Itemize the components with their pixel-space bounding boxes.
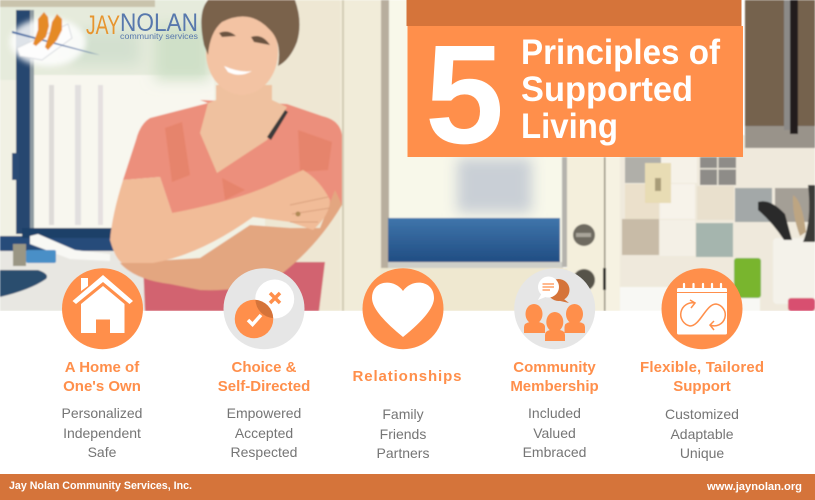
descriptors: Adaptable bbox=[670, 426, 734, 442]
logo wordmark bbox=[86, 9, 198, 41]
banner heading: Supported bbox=[521, 70, 693, 109]
icon: community people with speech bubbles bbox=[514, 268, 595, 349]
descriptors bbox=[665, 406, 739, 461]
logo backdrop and rowboat with orange figures bbox=[10, 12, 100, 66]
descriptors: Family bbox=[382, 406, 424, 422]
heading bbox=[510, 359, 599, 395]
principle 5 text bbox=[640, 359, 764, 461]
banner body bbox=[408, 26, 743, 157]
photo centre: door bbox=[265, 0, 624, 311]
icon: flexible calendar bbox=[662, 268, 742, 349]
principle 2 text bbox=[218, 359, 310, 460]
descriptors: Embraced bbox=[523, 444, 586, 460]
photo left: window and fence bbox=[0, 0, 345, 311]
logo wordmark: community services bbox=[120, 32, 198, 41]
heading: Community bbox=[513, 359, 596, 376]
big number 5: 5 bbox=[425, 15, 504, 173]
descriptors: Customized bbox=[665, 406, 739, 422]
white content panel bbox=[0, 311, 815, 474]
background photo: woman in kitchen bbox=[0, 0, 815, 311]
descriptors: Empowered bbox=[227, 405, 301, 421]
woman in coral shirt with crossed arms bbox=[110, 0, 342, 311]
banner heading bbox=[521, 33, 720, 146]
descriptors: Valued bbox=[533, 425, 576, 441]
heading: Membership bbox=[510, 378, 599, 395]
heading bbox=[218, 359, 310, 395]
principle 4 text bbox=[510, 359, 599, 460]
heading: Support bbox=[673, 378, 731, 395]
descriptors bbox=[62, 405, 142, 460]
logo wordmark: NOLAN bbox=[120, 9, 198, 37]
heading: Relationships bbox=[352, 368, 462, 385]
descriptors: Unique bbox=[680, 445, 724, 461]
heading: One's Own bbox=[63, 378, 141, 395]
descriptors: Respected bbox=[231, 444, 297, 460]
title banner bbox=[406, 0, 743, 173]
banner heading: Principles of bbox=[521, 33, 720, 72]
icon: heart bbox=[362, 268, 444, 349]
footer website: www.jaynolan.org bbox=[706, 481, 802, 493]
heading: A Home of bbox=[65, 359, 140, 376]
logo wordmark: JAY bbox=[86, 10, 120, 40]
descriptors bbox=[377, 406, 429, 461]
heading: Self-Directed bbox=[218, 378, 310, 395]
photo right: tiled kitchen wall, cabinet and counter bbox=[620, 0, 815, 311]
heading bbox=[63, 359, 141, 395]
icon: choice check and cross bbox=[224, 268, 304, 349]
principle 3 text bbox=[352, 368, 462, 461]
descriptors: Friends bbox=[380, 426, 426, 442]
icon: house bbox=[62, 268, 143, 349]
descriptors: Included bbox=[528, 405, 581, 421]
banner top band bbox=[406, 0, 742, 26]
descriptors: Accepted bbox=[235, 425, 293, 441]
footer organisation name: Jay Nolan Community Services, Inc. bbox=[9, 480, 192, 492]
descriptors: Independent bbox=[63, 425, 141, 441]
principle 1 text bbox=[62, 359, 142, 460]
banner heading: Living bbox=[521, 107, 618, 146]
heading: Choice & bbox=[231, 359, 297, 376]
descriptors bbox=[523, 405, 586, 460]
footer bar bbox=[0, 474, 815, 500]
descriptors: Personalized bbox=[62, 405, 142, 421]
descriptors: Partners bbox=[377, 445, 429, 461]
heading: Flexible, Tailored bbox=[640, 359, 764, 376]
descriptors: Safe bbox=[88, 444, 117, 460]
heading bbox=[640, 359, 764, 395]
descriptors bbox=[227, 405, 301, 460]
